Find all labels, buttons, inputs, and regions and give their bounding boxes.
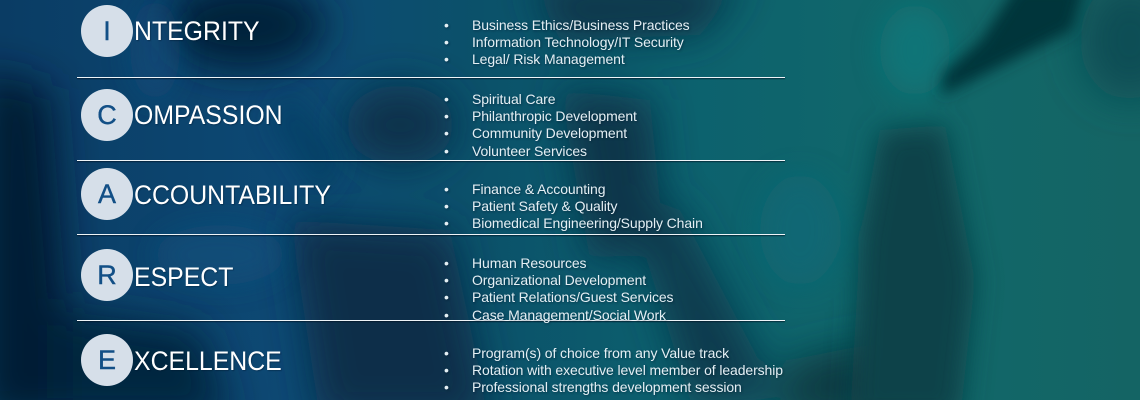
letter circle A [81, 168, 133, 220]
list: Compassion: Spiritual Care [472, 91, 555, 107]
list: Compassion: Philanthropic Development [472, 108, 637, 124]
letter circle E: E [98, 345, 116, 375]
list: Integrity: Information Technology/IT Security [472, 34, 684, 50]
row: Respect heading [81, 249, 234, 301]
row: Accountability heading [81, 168, 331, 220]
blue highlight shapes [130, 0, 180, 100]
list: Integrity [444, 17, 690, 68]
word: NTEGRITY [134, 16, 260, 46]
row: Compassion heading [81, 89, 283, 141]
list: Integrity: Business Ethics/Business Practices [472, 17, 690, 33]
letter circle I [81, 5, 133, 57]
list: Respect [444, 255, 674, 324]
list: Respect: Patient Relations/Guest Services [472, 289, 673, 305]
list: Excellence: Program(s) of choice from any Value track [472, 345, 729, 361]
row: Excellence heading [81, 334, 282, 386]
list: Respect: Case Management/Social Work [472, 307, 666, 323]
list: Compassion: Volunteer Services [472, 143, 587, 159]
list: Excellence [444, 345, 784, 396]
letter circle R [81, 249, 133, 301]
top-centre navy [165, 0, 325, 70]
divider lines [77, 77, 785, 78]
list: Accountability [444, 181, 704, 232]
word: XCELLENCE [134, 346, 282, 376]
list: Accountability: Biomedical Engineering/Supply Chain [472, 215, 703, 231]
list: Excellence: Professional strengths development session [472, 379, 742, 395]
list: Compassion [444, 91, 637, 159]
list: Respect: Organizational Development [472, 272, 646, 288]
lower dark [780, 340, 890, 400]
word: ESPECT [134, 262, 233, 292]
mid-left lower dark [290, 220, 490, 400]
letter circle I: I [103, 16, 111, 46]
list: Accountability: Patient Safety & Quality [472, 198, 617, 214]
letter circle C: C [97, 100, 117, 130]
dark column [850, 125, 975, 400]
list: Excellence: Rotation with executive level member of leadership [472, 362, 783, 378]
top band dark [530, 0, 745, 40]
top right [1080, 0, 1140, 100]
list: Accountability: Finance & Accounting [472, 181, 605, 197]
dark wedge [941, 0, 1085, 96]
letter circle A: A [98, 179, 116, 209]
list: Compassion: Community Development [472, 125, 627, 141]
word: OMPASSION [134, 100, 283, 130]
row: Integrity heading [81, 5, 260, 57]
blob at neck [345, 85, 455, 165]
list: Respect: Human Resources [472, 255, 586, 271]
letter circle C [81, 89, 133, 141]
list: Integrity: Legal/ Risk Management [472, 51, 625, 67]
teal dark shoulder [560, 90, 665, 260]
letter circle R: R [97, 260, 117, 290]
left dark edge [0, 70, 75, 400]
word: CCOUNTABILITY [134, 180, 331, 210]
letter circle E [81, 334, 133, 386]
bright teal highlight [880, 5, 950, 95]
